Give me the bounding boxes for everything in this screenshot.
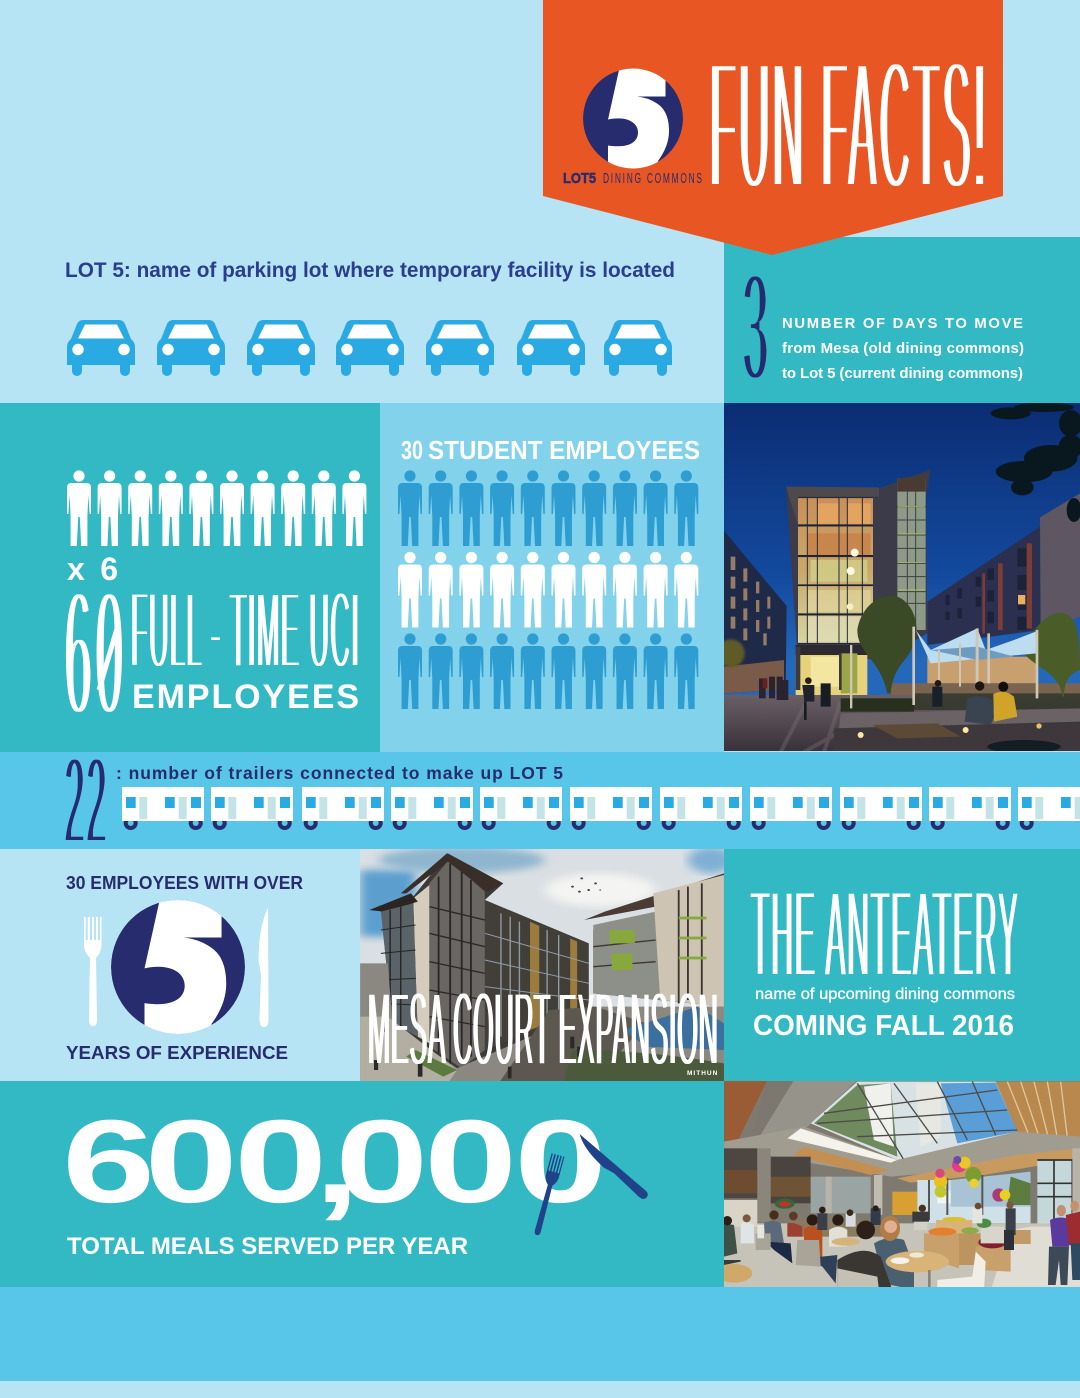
experience heading: 30 EMPLOYEES WITH OVER <box>66 873 303 893</box>
number 600,000: 600,000 <box>62 1095 607 1227</box>
photo: night exterior of building <box>717 400 1080 753</box>
photo: mesa court expansion <box>360 847 734 1088</box>
photo credit mithun: MITHUN <box>687 1070 718 1077</box>
photo: dining interior <box>716 1080 1080 1290</box>
panel: the anteatery <box>724 849 1080 1081</box>
logo wordmark <box>563 169 702 187</box>
employees: EMPLOYEES <box>132 678 359 716</box>
logo wordmark: DINING COMMONS <box>603 169 702 187</box>
icons: student rows <box>398 470 698 709</box>
days text: to Lot 5 (current dining commons) <box>782 365 1023 382</box>
mesa court expansion label: MESA COURT EXPANSION <box>368 972 718 1088</box>
bottom band <box>0 1287 1080 1381</box>
panel: full-time employees <box>0 403 380 753</box>
days text: NUMBER OF DAYS TO MOVE <box>782 316 1023 332</box>
icons: seven cars <box>67 320 672 376</box>
panel: days to move <box>724 237 1080 413</box>
number 3: 3 <box>743 240 767 413</box>
icon: fork <box>84 917 102 1026</box>
number 60: 60 <box>65 552 122 753</box>
meals caption: TOTAL MEALS SERVED PER YEAR <box>67 1233 468 1260</box>
coming fall 2016: COMING FALL 2016 <box>753 1010 1014 1042</box>
icon: fork on number <box>530 1153 564 1237</box>
panel: trailers strip <box>0 733 1080 870</box>
panel: years of experience <box>66 876 303 1059</box>
heading: lot 5: LOT 5: name of parking lot where temporary facility is located <box>65 259 675 282</box>
full-time uci: FULL - TIME UCI <box>131 569 359 693</box>
logo: lot 5 circle <box>583 68 683 168</box>
x 6: x 6 <box>67 551 118 587</box>
student heading: 30 <box>401 435 423 465</box>
icon: knife <box>258 908 269 1027</box>
number 22: 22 <box>65 733 106 870</box>
icon: knife on number <box>573 1134 650 1202</box>
student heading: STUDENT EMPLOYEES <box>428 435 700 465</box>
icons: trailers <box>122 787 1080 828</box>
banner: fun facts <box>543 0 1003 255</box>
trailers caption: : number of trailers connected to make up LOT 5 <box>116 763 563 783</box>
icon: big 5 plate <box>111 900 245 1034</box>
logo wordmark: LOT5 <box>563 169 596 186</box>
days text <box>782 316 1024 382</box>
panel: meals <box>0 1081 724 1287</box>
anteatery title: THE ANTEATERY <box>751 866 1018 1005</box>
title: FUN FACTS! <box>710 21 986 229</box>
days text: from Mesa (old dining commons) <box>782 340 1024 357</box>
anteatery subtitle: name of upcoming dining commons <box>755 986 1015 1003</box>
panel: student employees <box>380 403 724 752</box>
icons: ten people white <box>67 470 366 546</box>
experience caption: YEARS OF EXPERIENCE <box>66 1043 288 1063</box>
